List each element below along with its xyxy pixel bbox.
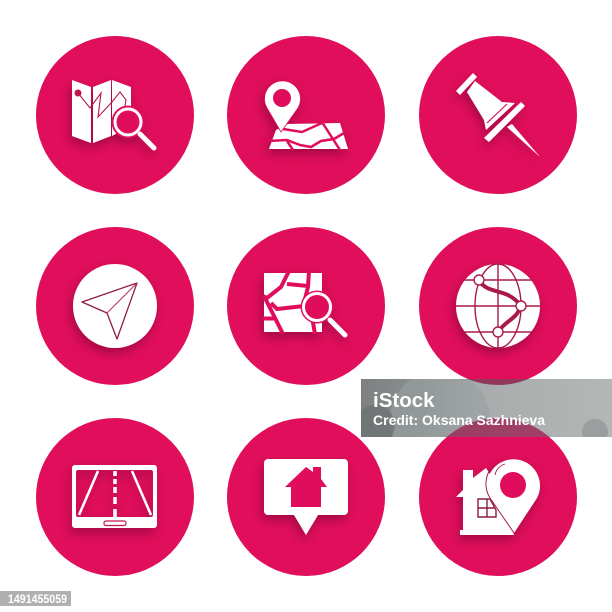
panel: city map search [227,227,385,385]
icon: pin on map [264,81,349,150]
panel: house with location pin [419,418,577,576]
watermark logo: iStock [373,389,435,412]
icon: speech bubble with house [264,459,348,535]
panel: GPS road tablet [36,418,194,576]
icon: house and pin [456,459,540,535]
icon: globe with route [456,264,540,348]
panel: push pin [419,36,577,194]
watermark banner [361,379,612,437]
icon: paper plane arrow in circle [73,264,157,348]
icon: push pin [456,73,540,157]
image id tag: 1491455059 [8,594,67,606]
icon: folded map search [72,80,154,148]
panel: home speech bubble [227,418,385,576]
panel: map with magnifier [36,36,194,194]
panel: location pin on map [227,36,385,194]
icon: street map with magnifier [263,271,345,335]
icon: tablet with road [72,465,157,528]
panel: globe route [419,227,577,385]
watermark credit: Credit: Oksana Sazhnieva [373,413,546,428]
panel: navigation arrow [36,227,194,385]
